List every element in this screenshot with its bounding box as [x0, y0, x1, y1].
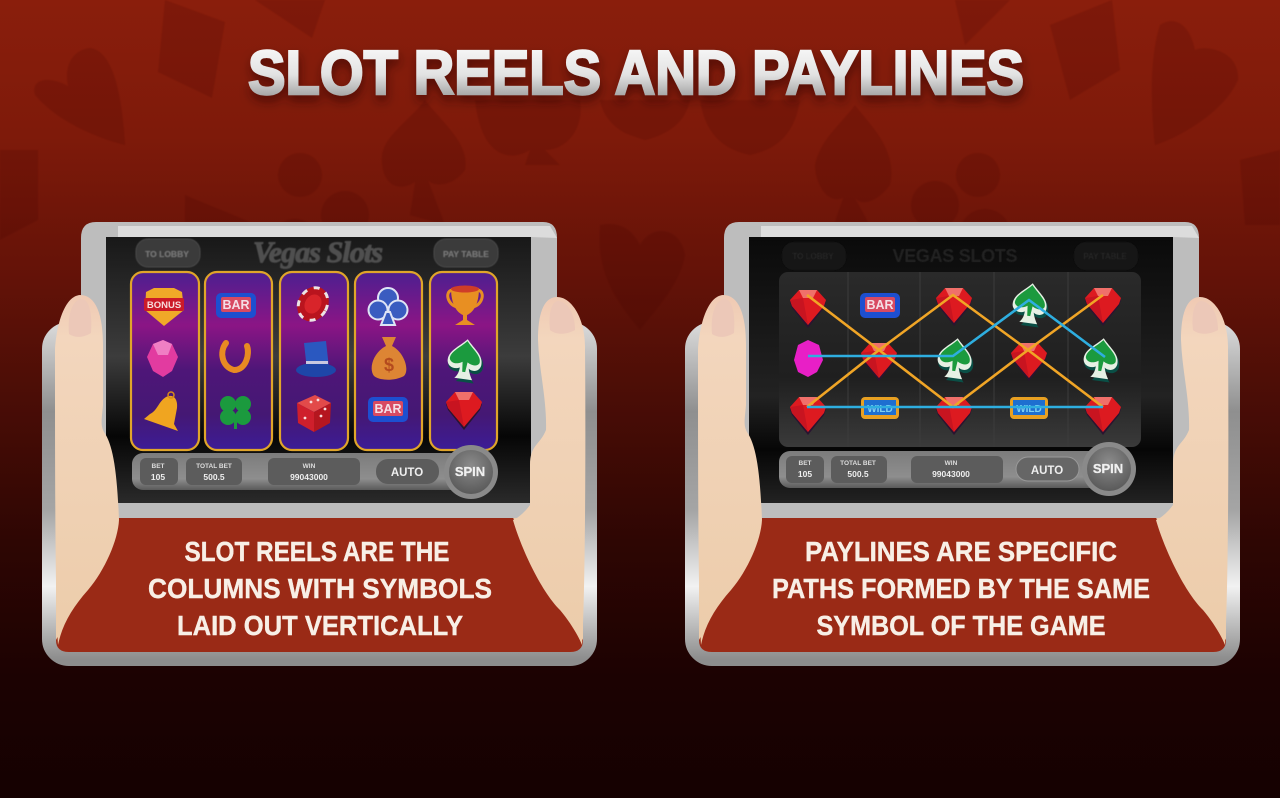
faded game header: Vegas Slots [253, 236, 383, 269]
panel: slot reels tablet [49, 222, 590, 659]
control bar: 105 [151, 472, 165, 482]
icon: ruby [790, 290, 826, 328]
control bar: 500.5 [847, 469, 869, 479]
faded game header: PAY TABLE [443, 249, 489, 259]
thumbnail [1192, 301, 1218, 334]
icon: ruby [861, 343, 897, 381]
caption background [699, 516, 1226, 652]
icon: ruby [1011, 343, 1047, 381]
panel: paylines tablet [692, 222, 1233, 659]
control bar: TOTAL BET [196, 463, 232, 470]
left hand [698, 295, 762, 645]
icon: red dice [297, 395, 331, 432]
paylines [807, 295, 1105, 407]
right hand [1156, 297, 1228, 645]
icon: trophy [448, 286, 482, 325]
icon: magenta gem [794, 340, 823, 377]
icon: bonus shield [144, 288, 184, 326]
faded game header [136, 236, 498, 269]
caption [772, 536, 1150, 641]
icon: casino chip [291, 281, 335, 327]
icon: money bag: $ [384, 355, 394, 375]
icon: pink gem [147, 340, 178, 377]
tablet screen [749, 237, 1173, 503]
tablet highlight [118, 226, 557, 238]
icon: bar symbol [368, 397, 408, 422]
control bar: 105 [798, 469, 812, 479]
control bar: 99043000 [932, 469, 970, 479]
caption: SYMBOL OF THE GAME [816, 610, 1106, 641]
background card suit pattern [0, 0, 1280, 330]
lower silver frame [49, 329, 590, 659]
icon: blue club [368, 288, 408, 325]
icon: green spade [935, 336, 977, 383]
control bar: 500.5 [203, 472, 225, 482]
icon: ruby [936, 288, 972, 326]
left hand [55, 295, 119, 645]
icon: ruby [936, 397, 972, 435]
caption: LAID OUT VERTICALLY [177, 610, 463, 641]
faded game header: TO LOBBY [792, 252, 834, 261]
thumbnail [712, 299, 734, 337]
icon: blue top hat [296, 341, 336, 377]
control bar [132, 445, 498, 499]
control bar: TOTAL BET [840, 460, 876, 467]
thumbnail [69, 299, 91, 337]
faded game header: VEGAS SLOTS [892, 246, 1018, 266]
tablet body [724, 222, 1199, 518]
caption [148, 536, 492, 641]
title: SLOT REELS AND PAYLINES [248, 39, 1024, 108]
caption: SLOT REELS ARE THE [184, 536, 450, 567]
tablet highlight [761, 226, 1199, 238]
right hand [513, 297, 585, 645]
icon: horseshoe [222, 343, 248, 370]
icon: bonus shield: BONUS [147, 300, 181, 311]
control bar: SPIN [1093, 461, 1123, 476]
control bar: WIN [945, 460, 958, 467]
control bar: 99043000 [290, 472, 328, 482]
control bar: SPIN [455, 464, 485, 479]
icon: green spade [445, 337, 487, 384]
tablet screen [106, 237, 531, 503]
icon: ruby [790, 397, 826, 435]
lower silver frame [692, 329, 1233, 659]
reels panel [779, 272, 1141, 447]
icon: clover [220, 396, 251, 429]
caption: COLUMNS WITH SYMBOLS [148, 573, 492, 604]
icon: wild symbol: WILD [867, 404, 893, 415]
control bar: BET [152, 463, 165, 470]
icon: bell [144, 392, 178, 431]
caption: PAYLINES ARE SPECIFIC [805, 536, 1117, 567]
tablet body [81, 222, 557, 518]
control bar: WIN [303, 463, 316, 470]
faded game header [782, 242, 1138, 270]
caption background [56, 516, 583, 652]
control bar: AUTO [391, 467, 423, 479]
icon: ruby [1085, 397, 1121, 435]
icon: red gem [446, 392, 482, 430]
icon: bar symbol [860, 293, 900, 318]
icon: green spade [1010, 281, 1052, 328]
thumbnail [549, 301, 575, 334]
icon: green spade [1081, 336, 1123, 383]
icon: ruby [1085, 288, 1121, 326]
icon: money bag [372, 337, 406, 380]
faded game header: PAY TABLE [1083, 252, 1127, 261]
slot reels [131, 272, 497, 450]
icon: wild symbol [861, 397, 899, 419]
control bar [779, 442, 1136, 496]
icon: bar symbol [216, 293, 256, 318]
faded game header: TO LOBBY [145, 249, 189, 259]
icon: wild symbol: WILD [1016, 404, 1042, 415]
control bar: BET [798, 460, 812, 467]
control bar: AUTO [1031, 465, 1063, 477]
caption: PATHS FORMED BY THE SAME [772, 573, 1150, 604]
icon: wild symbol [1010, 397, 1048, 419]
